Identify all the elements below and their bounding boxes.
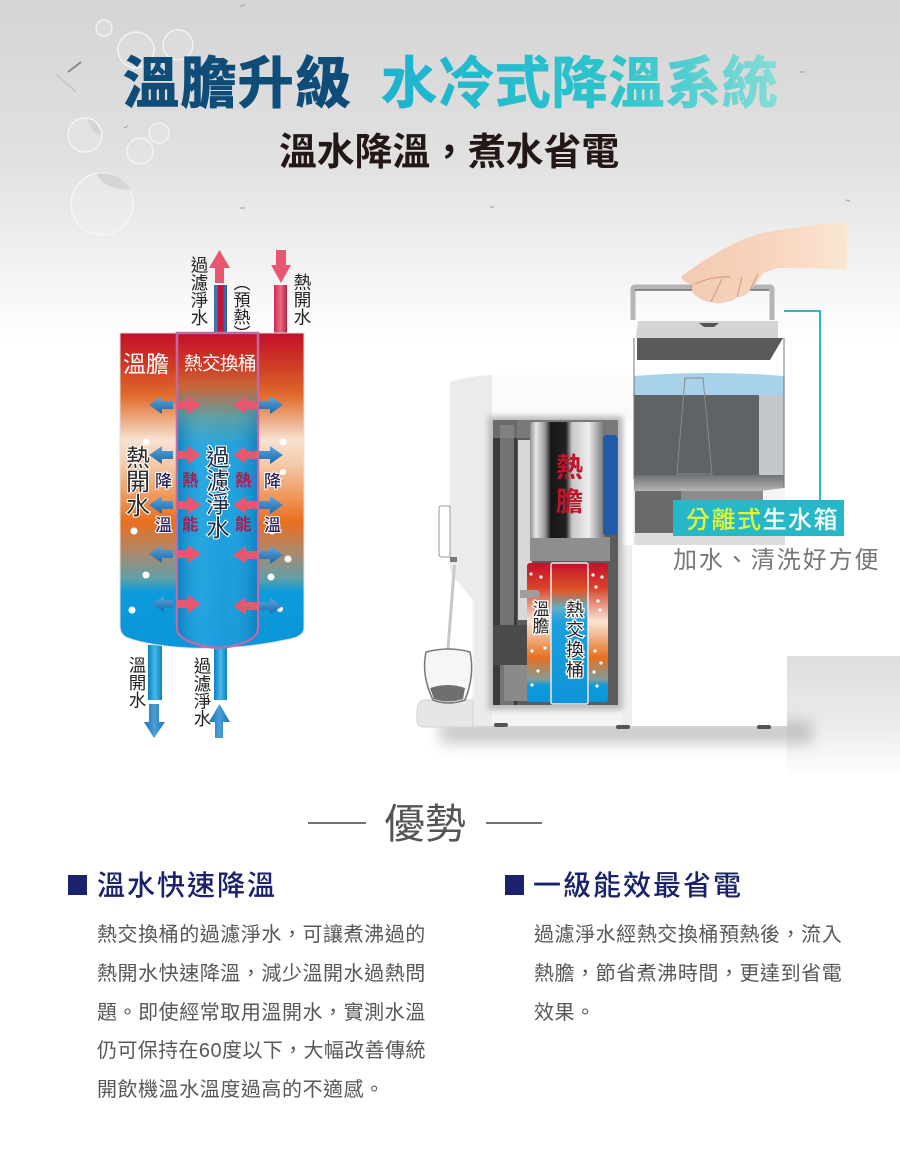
callout box <box>673 500 844 536</box>
left body text: 熱開水快速降溫，減少溫開水過熱問 <box>97 962 426 985</box>
pipes <box>148 285 287 700</box>
light interior <box>759 395 784 475</box>
arrow: filtered water in <box>209 704 230 738</box>
inner tube <box>677 378 712 474</box>
right body text: 過濾淨水經熱交換桶預熱後，流入 <box>534 923 842 946</box>
inner exchange barrel <box>177 333 258 648</box>
pipe labels: 過濾淨水 <box>192 657 212 727</box>
glass of water <box>425 649 472 703</box>
callout: removable tank <box>673 500 844 536</box>
caption: 加水、清洗好方便 <box>673 547 880 574</box>
drip tray <box>417 700 473 727</box>
title: dark part: 溫膽升級 <box>123 52 351 115</box>
left body text: 仍可保持在60度以下，大幅改善傳統 <box>97 1039 426 1062</box>
heat-energy labels <box>182 471 252 534</box>
inner labels <box>122 445 281 539</box>
section heading: advantages: 優勢 <box>384 801 466 847</box>
tank labels: 溫膽 <box>123 351 169 377</box>
pipe labels: 熱開水 <box>292 273 312 326</box>
mini tank labels <box>530 600 584 680</box>
hot tank label <box>556 453 583 517</box>
mini tank labels: 溫膽 <box>530 600 549 635</box>
spout and water stream <box>439 506 457 668</box>
callout text: 分離式生水箱 <box>686 507 839 534</box>
exchange arrows <box>149 396 283 615</box>
left body text: 熱交換桶的過濾淨水，可讓煮沸過的 <box>97 923 426 946</box>
title: cyan part: 水冷式降溫系統 <box>381 52 778 115</box>
hot tank <box>530 422 617 538</box>
handle inner edge <box>635 289 769 291</box>
bubbles <box>68 20 193 235</box>
tank upper shade <box>637 338 783 360</box>
mini tank labels: 熱交換桶 <box>564 600 584 680</box>
pipe labels <box>127 256 312 727</box>
tank labels: 熱交換桶 <box>184 353 256 374</box>
heat dots <box>128 438 292 614</box>
tank white band <box>634 360 784 376</box>
dispenser body <box>450 375 787 729</box>
lid notch <box>699 323 719 327</box>
outer tank <box>120 333 304 648</box>
heat-energy labels: 能 <box>182 515 199 534</box>
title <box>123 52 778 115</box>
arrow: hot water in <box>271 250 291 283</box>
dark interior <box>634 395 759 475</box>
product: water dispenser <box>417 375 812 744</box>
left body text <box>97 923 426 1101</box>
left heading: 溫水快速降溫 <box>97 870 277 901</box>
pipe labels: 過濾淨水 <box>189 256 209 326</box>
background paper texture <box>0 0 900 345</box>
inner labels: 過濾淨水 <box>203 445 230 539</box>
interior cavity <box>488 416 623 710</box>
heat-energy labels: 熱 <box>235 471 252 490</box>
inner labels: 溫 <box>264 516 281 535</box>
right body text: 效果。 <box>534 1001 596 1024</box>
hot tank label: 膽 <box>556 487 583 517</box>
heat-energy labels: 能 <box>235 515 252 534</box>
tank lid <box>636 321 778 338</box>
bullet <box>505 875 524 895</box>
water layer <box>634 373 784 395</box>
tank back housing <box>633 378 785 545</box>
bullet <box>68 875 87 895</box>
inner labels: 溫 <box>155 516 172 535</box>
pipe labels: 溫開水 <box>127 656 147 708</box>
inner labels: 降 <box>264 472 281 491</box>
product shadow <box>440 720 812 744</box>
arrow: warm water out <box>144 704 165 738</box>
left body text: 開飲機溫水溫度過高的不適感。 <box>97 1078 385 1101</box>
mini exchange tank <box>520 563 608 704</box>
pipe labels: （預熱） <box>230 274 250 342</box>
inner labels: 熱開水 <box>122 445 150 517</box>
hot tank label: 熱 <box>556 453 583 483</box>
removable raw water tank <box>633 222 847 545</box>
right body text: 熱膽，節省煮沸時間，更達到省電 <box>534 962 842 985</box>
subtitle: 溫水降溫，煮水省電 <box>279 132 619 174</box>
right column <box>505 870 842 1024</box>
arrow: filtered water out <box>209 250 230 283</box>
left column <box>68 870 426 1101</box>
heat-energy labels: 熱 <box>182 471 199 490</box>
right body text <box>534 923 842 1024</box>
tank base <box>634 475 784 491</box>
tank handle <box>633 287 772 320</box>
tank glass walls <box>634 338 784 488</box>
diagram: heat exchange tank <box>120 250 312 738</box>
floor band <box>787 656 900 778</box>
callout leader line <box>784 311 820 500</box>
inner labels: 降 <box>155 472 172 491</box>
left body text: 題。即使經常取用溫開水，實測水溫 <box>97 1001 426 1024</box>
right heading: 一級能效最省電 <box>533 870 743 901</box>
hand <box>682 222 847 304</box>
tank labels <box>123 351 256 377</box>
